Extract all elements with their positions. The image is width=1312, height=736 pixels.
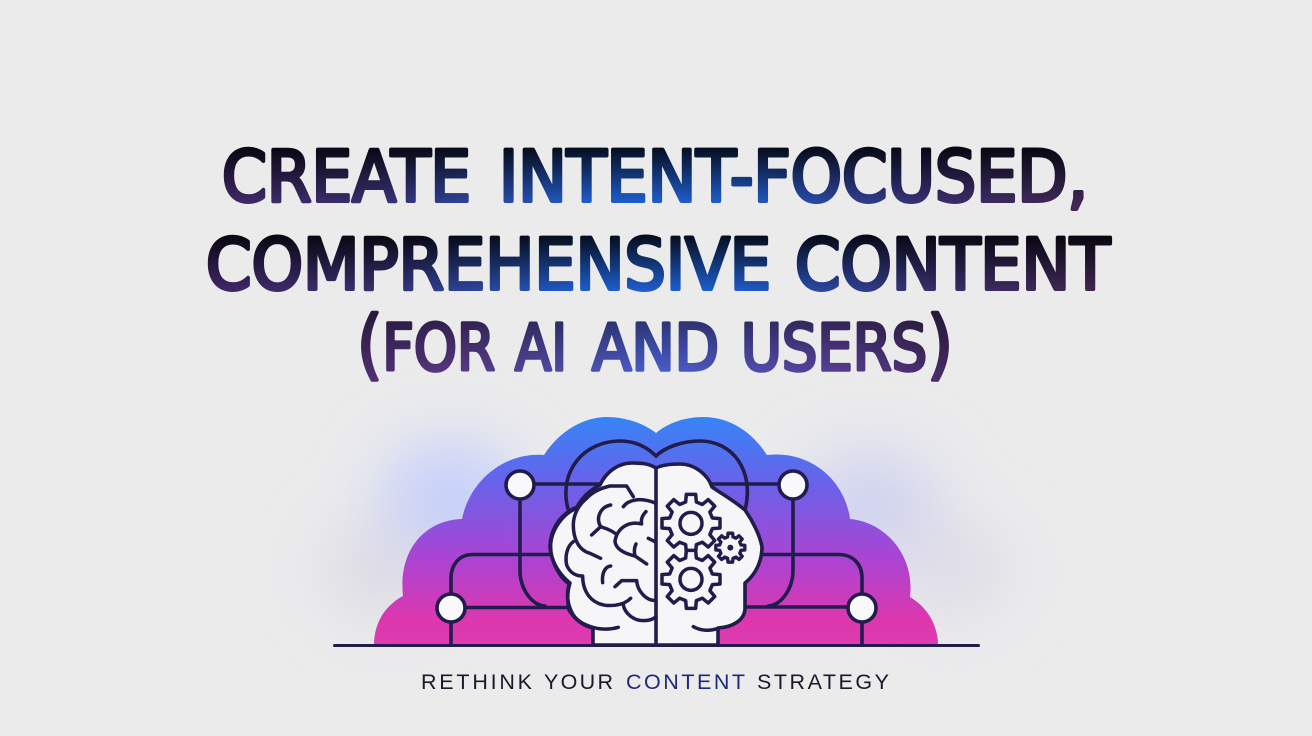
gear: lower [662,550,720,608]
tagline: STRATEGY [757,670,889,694]
brain right lower hook [693,627,718,630]
soft glow behind cloud [325,440,1010,615]
brain centre divider [654,466,658,645]
brain left hemisphere folds [551,486,656,629]
title line 3: USERS) [741,299,953,388]
title line 2: COMPREHENSIVE [206,224,771,306]
network node: top left [506,471,534,499]
tagline: RETHINK [421,670,533,694]
circuit lines [451,441,862,645]
title line 1: INTENT-FOCUSED, [499,136,1088,218]
brain silhouette [550,463,762,645]
gear: upper [662,494,720,552]
network node: bottom right [848,594,876,622]
title line 1: CREATE [222,136,471,218]
title [206,136,1110,388]
gears [662,494,745,630]
tagline: YOUR [544,670,613,694]
tagline [421,670,889,694]
gradient cloud [374,417,938,645]
gear: small [716,533,745,562]
title line 2: CONTENT [795,224,1110,306]
title line 3: (FOR [357,299,495,388]
title line 3: AI [515,312,567,386]
tagline: CONTENT [626,670,745,694]
title line 1 [222,136,1088,218]
title line 2 [206,224,1110,306]
baseline [333,644,980,647]
title line 3: AND [592,312,719,386]
network node: top right [779,471,807,499]
title line 3 [357,299,953,388]
network node: bottom left [437,594,465,622]
illustration: brain in cloud [325,417,1010,647]
